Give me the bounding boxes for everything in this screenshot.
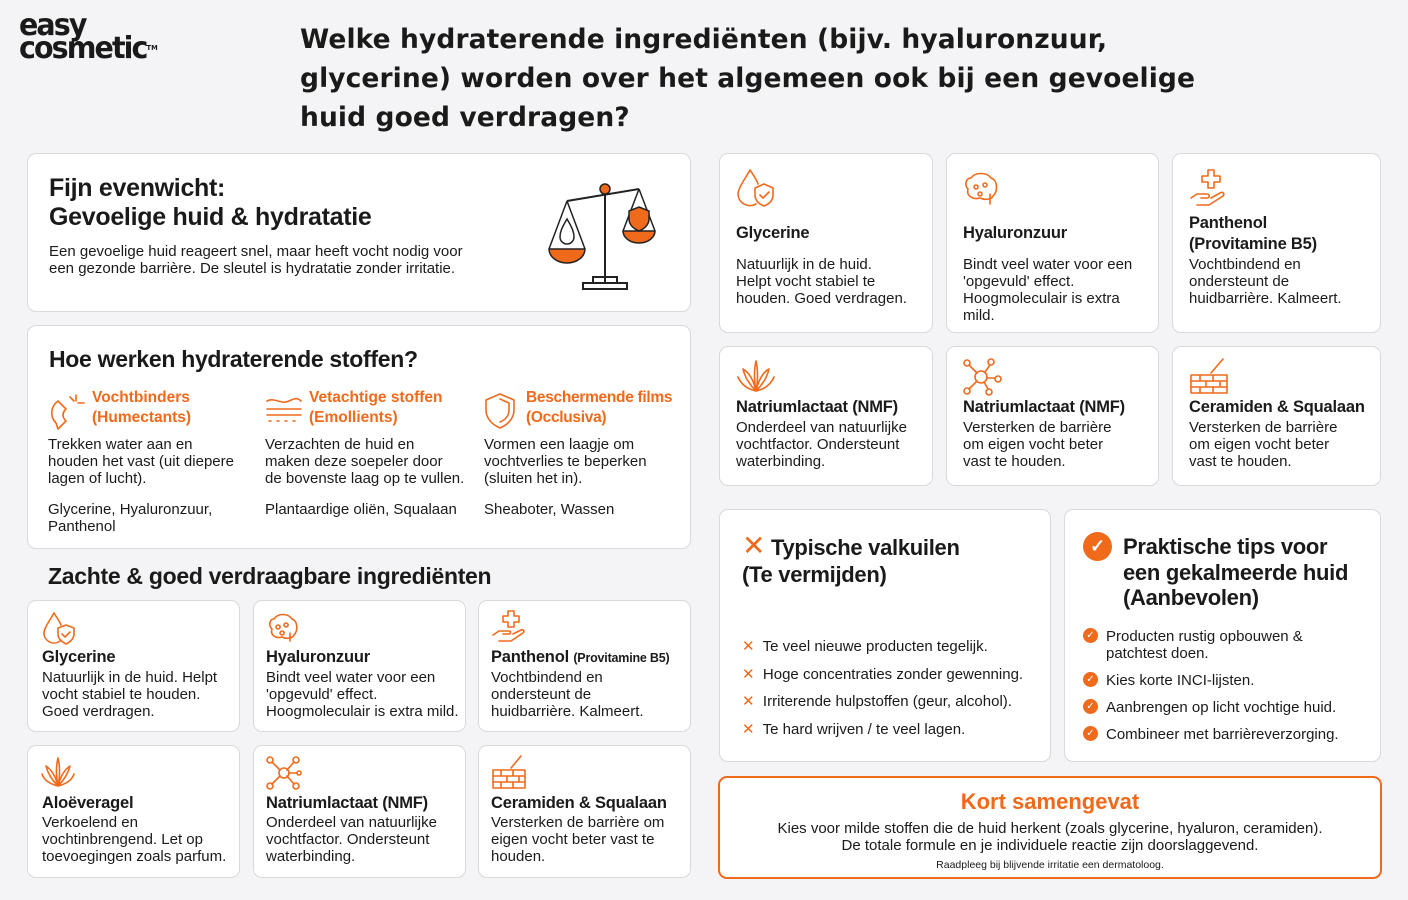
card: aloe small: vochtinbrengend. Let op — [42, 831, 203, 848]
card: glycerine large — [719, 153, 933, 333]
card: natriumlactaat small: Natriumlactaat (NMF) — [266, 794, 428, 812]
column: vochtbinders: Glycerine, Hyaluronzuur, — [48, 501, 212, 518]
list: ✕ Te hard wrijven / te veel lagen. — [742, 720, 965, 738]
column: vetachtige stoffen: de bovenste laag op te vullen. — [265, 470, 464, 487]
heading: (Te vermijden) — [742, 562, 887, 587]
title — [300, 24, 1195, 133]
card: ceramiden large: vast te houden. — [1189, 453, 1292, 470]
panel: hoe werken — [27, 325, 691, 549]
card: hyaluronzuur large: mild. — [963, 307, 995, 324]
card: hyaluronzuur small: Hoogmoleculair is extra mild. — [266, 703, 459, 720]
column: vetachtige stoffen: maken deze soepeler door — [265, 453, 443, 470]
card: glycerine large: Glycerine — [736, 224, 809, 242]
card: panthenol small: Vochtbindend en — [491, 669, 603, 686]
card: hyaluronzuur small: 'opgevuld' effect. — [266, 686, 377, 703]
list: Kies korte INCI-lijsten. — [1106, 672, 1254, 689]
card: ceramiden large: Ceramiden & Squalaan — [1189, 398, 1365, 416]
card: natriumlactaat large 1 — [719, 346, 933, 486]
card: ceramiden large: om eigen vocht beter — [1189, 436, 1329, 453]
card: aloe small: toevoegingen zoals parfum. — [42, 848, 226, 865]
column: vochtbinders: houden het vast (uit diepere — [48, 453, 234, 470]
card: panthenol large: Panthenol — [1189, 214, 1267, 232]
heading: Kort samengevat — [961, 789, 1139, 814]
list: ✕ Hoge concentraties zonder gewenning. — [742, 666, 1023, 682]
card: natriumlactaat large 2 — [946, 346, 1159, 486]
text: een gezonde barrière. De sleutel is hydratatie zonder irritatie. — [49, 260, 455, 277]
card: glycerine small: Goed verdragen. — [42, 703, 155, 720]
title: huid goed verdragen? — [300, 102, 630, 133]
card: natriumlactaat small: Onderdeel van natuurlijke — [266, 814, 437, 831]
card: natriumlactaat small: waterbinding. — [266, 848, 355, 865]
list — [742, 638, 1023, 738]
column: beschermende films: (Occlusiva) — [526, 409, 606, 426]
card: panthenol large: ondersteunt de — [1189, 273, 1289, 290]
panel: praktische tips — [1064, 509, 1381, 762]
list: Producten rustig opbouwen & — [1106, 628, 1303, 645]
title: Welke hydraterende ingrediënten (bijv. hyaluronzuur, — [300, 24, 1107, 55]
column: vetachtige stoffen: Plantaardige oliën, Squalaan — [265, 501, 457, 518]
card: panthenol small: ondersteunt de — [491, 686, 591, 703]
list — [1083, 628, 1339, 743]
column: vochtbinders — [48, 389, 234, 535]
column: vochtbinders: (Humectants) — [92, 409, 191, 426]
list: ✕ Irriterende hulpstoffen (geur, alcohol). — [742, 693, 1012, 710]
card: natriumlactaat small: vochtfactor. Ondersteunt — [266, 831, 429, 848]
card: glycerine small: vocht stabiel te houden. — [42, 686, 200, 703]
column: vochtbinders: lagen of lucht). — [48, 470, 146, 487]
card: glycerine small: Natuurlijk in de huid. Helpt — [42, 669, 217, 686]
list: ✕ Te veel nieuwe producten tegelijk. — [742, 638, 988, 655]
card: natriumlactaat large 1: waterbinding. — [736, 453, 825, 470]
card: panthenol large: Vochtbindend en — [1189, 256, 1301, 273]
heading: (Aanbevolen) — [1123, 585, 1259, 610]
card: glycerine large: Natuurlijk in de huid. — [736, 256, 872, 273]
column: beschermende films: Sheaboter, Wassen — [484, 501, 614, 518]
text — [777, 820, 1322, 854]
text — [49, 243, 463, 277]
check icon — [1083, 532, 1112, 561]
card: glycerine small — [27, 600, 240, 732]
card: ceramiden large: Versterken de barrière — [1189, 419, 1337, 436]
text: Kies voor milde stoffen die de huid herkent (zoals glycerine, hyaluron, ceramiden). — [777, 820, 1322, 837]
card: hyaluronzuur small: Hyaluronzuur — [266, 648, 370, 666]
heading — [742, 530, 960, 587]
card: panthenol large: huidbarrière. Kalmeert. — [1189, 290, 1342, 307]
card: panthenol large: (Provitamine B5) — [1189, 235, 1317, 253]
card: natriumlactaat small — [253, 745, 466, 878]
column: beschermende films: Beschermende films — [526, 389, 672, 406]
list: Aanbrengen op licht vochtige huid. — [1106, 699, 1336, 716]
card: ceramiden small: eigen vocht beter vast te — [491, 831, 654, 848]
card: hyaluronzuur large: Hoogmoleculair is extra — [963, 290, 1120, 307]
card: panthenol small: huidbarrière. Kalmeert. — [491, 703, 644, 720]
heading: ✕ Typische valkuilen — [742, 530, 960, 561]
list: Combineer met barrièreverzorging. — [1106, 726, 1339, 743]
text: De totale formule en je individuele reactie zijn doorslaggevend. — [842, 837, 1258, 854]
card: panthenol small: Panthenol (Provitamine B5) — [491, 648, 669, 666]
heading — [49, 174, 372, 231]
column: vetachtige stoffen — [265, 389, 464, 518]
card: glycerine large: houden. Goed verdragen. — [736, 290, 907, 307]
list: patchtest doen. — [1106, 645, 1209, 662]
card: aloe small: Aloëveragel — [42, 794, 133, 812]
heading: een gekalmeerde huid — [1123, 560, 1348, 584]
card: panthenol large — [1172, 153, 1381, 333]
text: Een gevoelige huid reageert snel, maar heeft vocht nodig voor — [49, 243, 463, 260]
column: vetachtige stoffen: Vetachtige stoffen — [309, 389, 442, 406]
card: glycerine small: Glycerine — [42, 648, 115, 666]
card: natriumlactaat large 1: Natriumlactaat (NMF) — [736, 398, 898, 416]
column: vochtbinders: Panthenol — [48, 518, 116, 535]
card: ceramiden small: houden. — [491, 848, 545, 865]
column: vochtbinders: Vochtbinders — [92, 389, 190, 406]
card: ceramiden small: Versterken de barrière om — [491, 814, 664, 831]
panel: typische valkuilen — [719, 509, 1051, 762]
column: vetachtige stoffen: (Emollients) — [309, 409, 398, 426]
card: glycerine large: Helpt vocht stabiel te — [736, 273, 875, 290]
card: hyaluronzuur large — [946, 153, 1159, 333]
card: panthenol small — [478, 600, 691, 732]
card: natriumlactaat large 2: Natriumlactaat (NMF) — [963, 398, 1125, 416]
heading: Fijn evenwicht: — [49, 174, 225, 202]
card: aloe small: Verkoelend en — [42, 814, 138, 831]
heading: zachte ingredienten: Zachte & goed verdraagbare ingrediënten — [48, 563, 491, 589]
card: natriumlactaat large 1: Onderdeel van natuurlijke — [736, 419, 907, 436]
card: aloe small — [27, 745, 240, 878]
heading — [1123, 534, 1348, 610]
title: glycerine) worden over het algemeen ook bij een gevoelige — [300, 63, 1195, 94]
card: ceramiden small: Ceramiden & Squalaan — [491, 794, 667, 812]
column: vochtbinders: Trekken water aan en — [48, 436, 193, 453]
column: beschermende films: Vormen een laagje om — [484, 436, 634, 453]
panel: kort samengevat — [718, 776, 1382, 879]
list: ✓ — [1086, 701, 1095, 712]
icon: scale — [548, 183, 656, 290]
column: beschermende films — [484, 389, 672, 518]
column: beschermende films: vochtverlies te beperken — [484, 453, 647, 470]
card: hyaluronzuur small: Bindt veel water voor een — [266, 669, 435, 686]
card: hyaluronzuur large: Bindt veel water voor een — [963, 256, 1132, 273]
logo: cosmeticTM — [19, 31, 158, 66]
card: natriumlactaat large 2: vast te houden. — [963, 453, 1066, 470]
card: hyaluronzuur large: 'opgevuld' effect. — [963, 273, 1074, 290]
column: beschermende films: (sluiten het in). — [484, 470, 582, 487]
list: ✓ — [1086, 630, 1095, 641]
card: natriumlactaat large 2: Versterken de barrière — [963, 419, 1111, 436]
card: ceramiden large — [1172, 346, 1381, 486]
heading: Gevoelige huid & hydratatie — [49, 203, 372, 231]
card: natriumlactaat large 2: om eigen vocht beter — [963, 436, 1103, 453]
card: ceramiden small — [478, 745, 691, 878]
column: vetachtige stoffen: Verzachten de huid en — [265, 436, 414, 453]
card: natriumlactaat large 1: vochtfactor. Ondersteunt — [736, 436, 899, 453]
card: hyaluronzuur large: Hyaluronzuur — [963, 224, 1067, 242]
list: ✓ — [1086, 674, 1095, 685]
logo: easy — [19, 8, 86, 43]
list: ✓ — [1086, 728, 1095, 739]
panel: fijn evenwicht — [27, 153, 691, 312]
footnote: Raadpleeg bij blijvende irritatie een dermatoloog. — [936, 859, 1164, 871]
check icon: ✓ — [1090, 536, 1105, 556]
card: hyaluronzuur small — [253, 600, 466, 732]
heading: Praktische tips voor — [1123, 534, 1327, 559]
heading: Hoe werken hydraterende stoffen? — [49, 346, 418, 372]
logo — [19, 8, 158, 66]
